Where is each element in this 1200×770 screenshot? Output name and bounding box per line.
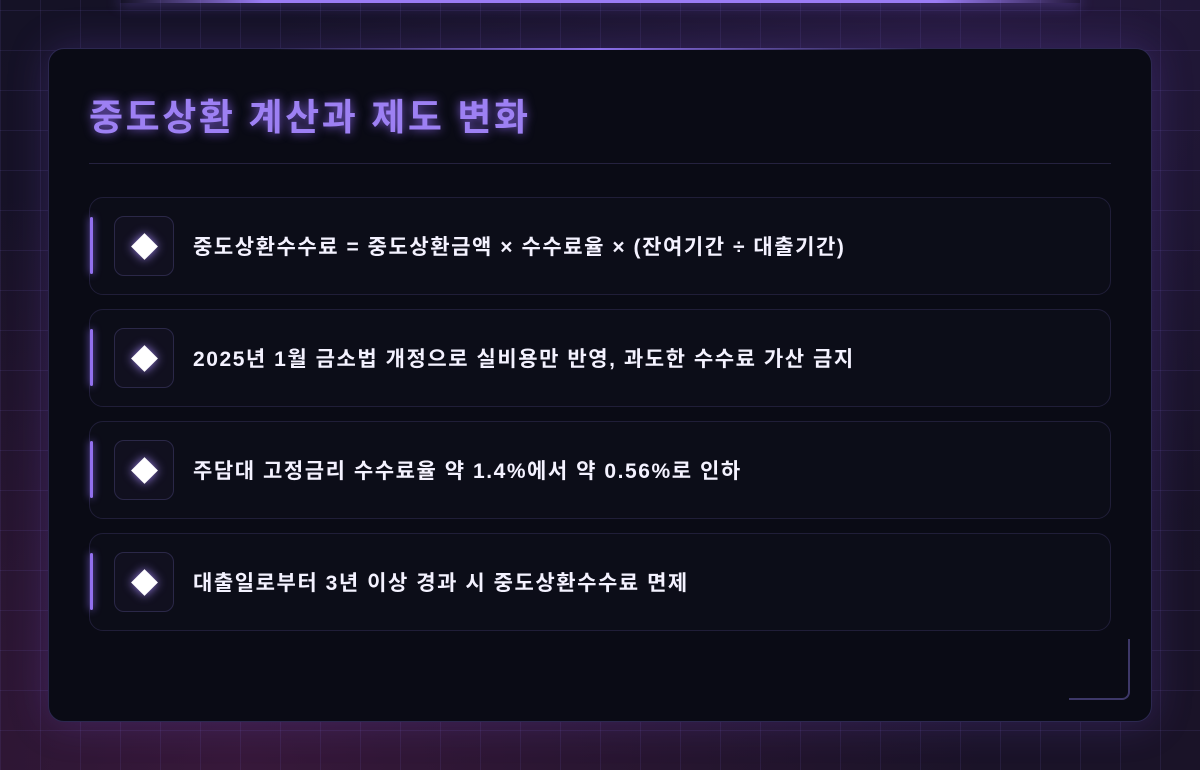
- icon: diamond: [114, 328, 174, 388]
- text: rate reduction: 주담대 고정금리 수수료율 약 1.4%에서 약 0.56%로 인하: [193, 460, 742, 483]
- item 3: [89, 421, 1111, 519]
- item 1: [89, 197, 1111, 295]
- text: formula: 중도상환수수료 = 중도상환금액 × 수수료율 × (잔여기간 ÷ 대출기간): [193, 236, 845, 259]
- item 4: [89, 533, 1111, 631]
- item 2: [89, 309, 1111, 407]
- icon: diamond: [114, 552, 174, 612]
- icon: diamond: [114, 216, 174, 276]
- text: law change: 2025년 1월 금소법 개정으로 실비용만 반영, 과도한 수수료 가산 금지: [193, 348, 855, 371]
- text: exemption: 대출일로부터 3년 이상 경과 시 중도상환수수료 면제: [193, 572, 689, 595]
- title: 중도상환 계산과 제도 변화: [89, 97, 531, 138]
- icon: diamond: [114, 440, 174, 500]
